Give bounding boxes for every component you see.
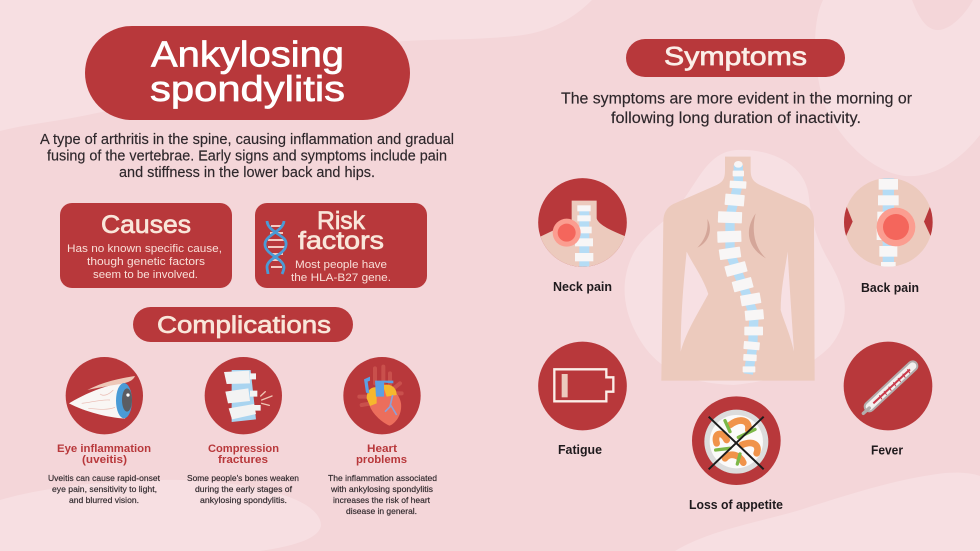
symptom: loss of appetite: Loss of appetite bbox=[689, 497, 783, 512]
complication: eye inflammation: Eye inflammation bbox=[57, 443, 151, 455]
complication: compression fractures bbox=[187, 357, 299, 505]
panel: risk factors: the HLA-B27 gene. bbox=[291, 272, 391, 284]
complication: eye inflammation: eye pain, sensitivity to light, bbox=[52, 484, 157, 494]
icon: heart bbox=[343, 357, 421, 434]
complication: compression fractures: during the early stages of bbox=[195, 484, 293, 494]
symptoms intro text: following long duration of inactivity. bbox=[611, 110, 861, 127]
panel: causes: Has no known specific cause, bbox=[67, 243, 222, 255]
symptom: back pain bbox=[840, 178, 937, 295]
panel: causes: though genetic factors bbox=[87, 256, 205, 268]
panel: risk factors bbox=[255, 203, 427, 288]
icon: fractured vertebrae bbox=[205, 357, 282, 434]
complication: eye inflammation: and blurred vision. bbox=[69, 495, 139, 505]
icon: thermometer bbox=[844, 342, 932, 430]
heading: symptoms bbox=[626, 39, 845, 77]
complication: heart problems: increases the risk of heart bbox=[333, 495, 431, 505]
panel: causes: Causes bbox=[101, 211, 191, 239]
icon: back pain bbox=[840, 178, 937, 267]
panel: causes: seem to be involved. bbox=[93, 269, 198, 281]
symptoms intro text bbox=[561, 91, 912, 127]
complication: heart problems: with ankylosing spondylitis bbox=[330, 484, 433, 494]
complication: compression fractures: Some people's bones weaken bbox=[187, 473, 299, 483]
symptom: neck pain: Neck pain bbox=[553, 279, 612, 294]
heading: symptoms: Symptoms bbox=[664, 41, 807, 71]
icon: DNA helix bbox=[265, 221, 286, 274]
complication: compression fractures: fractures bbox=[218, 454, 268, 466]
symptom: fever bbox=[844, 342, 932, 458]
description: and stiffness in the lower back and hips. bbox=[119, 165, 375, 181]
complication: compression fractures: Compression bbox=[208, 443, 279, 455]
complication: compression fractures: ankylosing spondylitis. bbox=[200, 495, 287, 505]
icon: neck pain bbox=[533, 178, 628, 270]
complication: heart problems: The inflammation associated bbox=[328, 473, 437, 483]
symptom: back pain: Back pain bbox=[861, 280, 919, 295]
icon: eye bbox=[66, 357, 143, 434]
description: fusing of the vertebrae. Early signs and symptoms include pain bbox=[47, 149, 447, 165]
description: A type of arthritis in the spine, causing inflammation and gradual bbox=[40, 132, 454, 148]
complication: eye inflammation: Uveitis can cause rapid-onset bbox=[48, 473, 161, 483]
complication: heart problems: problems bbox=[356, 454, 407, 466]
illustration: back with curved spine bbox=[625, 150, 845, 385]
heading: complications bbox=[133, 307, 353, 342]
title: spondylitis bbox=[150, 68, 345, 109]
title: Ankylosing bbox=[151, 34, 344, 75]
icon: low battery bbox=[538, 342, 627, 430]
background blob: bottom right bbox=[675, 473, 980, 551]
symptom: fever: Fever bbox=[871, 442, 903, 458]
panel: risk factors: Risk bbox=[317, 207, 365, 235]
title bbox=[85, 26, 410, 120]
panel: risk factors: factors bbox=[298, 227, 384, 255]
heading: complications: Complications bbox=[157, 312, 331, 339]
complication: eye inflammation bbox=[48, 357, 161, 505]
complication: heart problems: Heart bbox=[367, 443, 397, 455]
symptoms intro text: The symptoms are more evident in the morning or bbox=[561, 91, 912, 108]
symptom: neck pain bbox=[533, 178, 628, 294]
symptom: fatigue: Fatigue bbox=[558, 442, 602, 457]
symptom: fatigue bbox=[538, 342, 627, 457]
background blob: top left bbox=[0, 0, 592, 131]
complication: heart problems bbox=[328, 357, 437, 516]
complication: eye inflammation: (uveitis) bbox=[82, 454, 127, 466]
complication: heart problems: disease in general. bbox=[346, 506, 417, 516]
panel: causes bbox=[60, 203, 232, 288]
background blob: bottom left bbox=[0, 480, 321, 551]
panel: risk factors: Most people have bbox=[295, 259, 387, 271]
icon: crossed-out plate of food bbox=[692, 396, 781, 485]
description bbox=[40, 132, 454, 181]
background blob: top right bbox=[815, 0, 980, 176]
symptom: loss of appetite bbox=[689, 396, 783, 512]
